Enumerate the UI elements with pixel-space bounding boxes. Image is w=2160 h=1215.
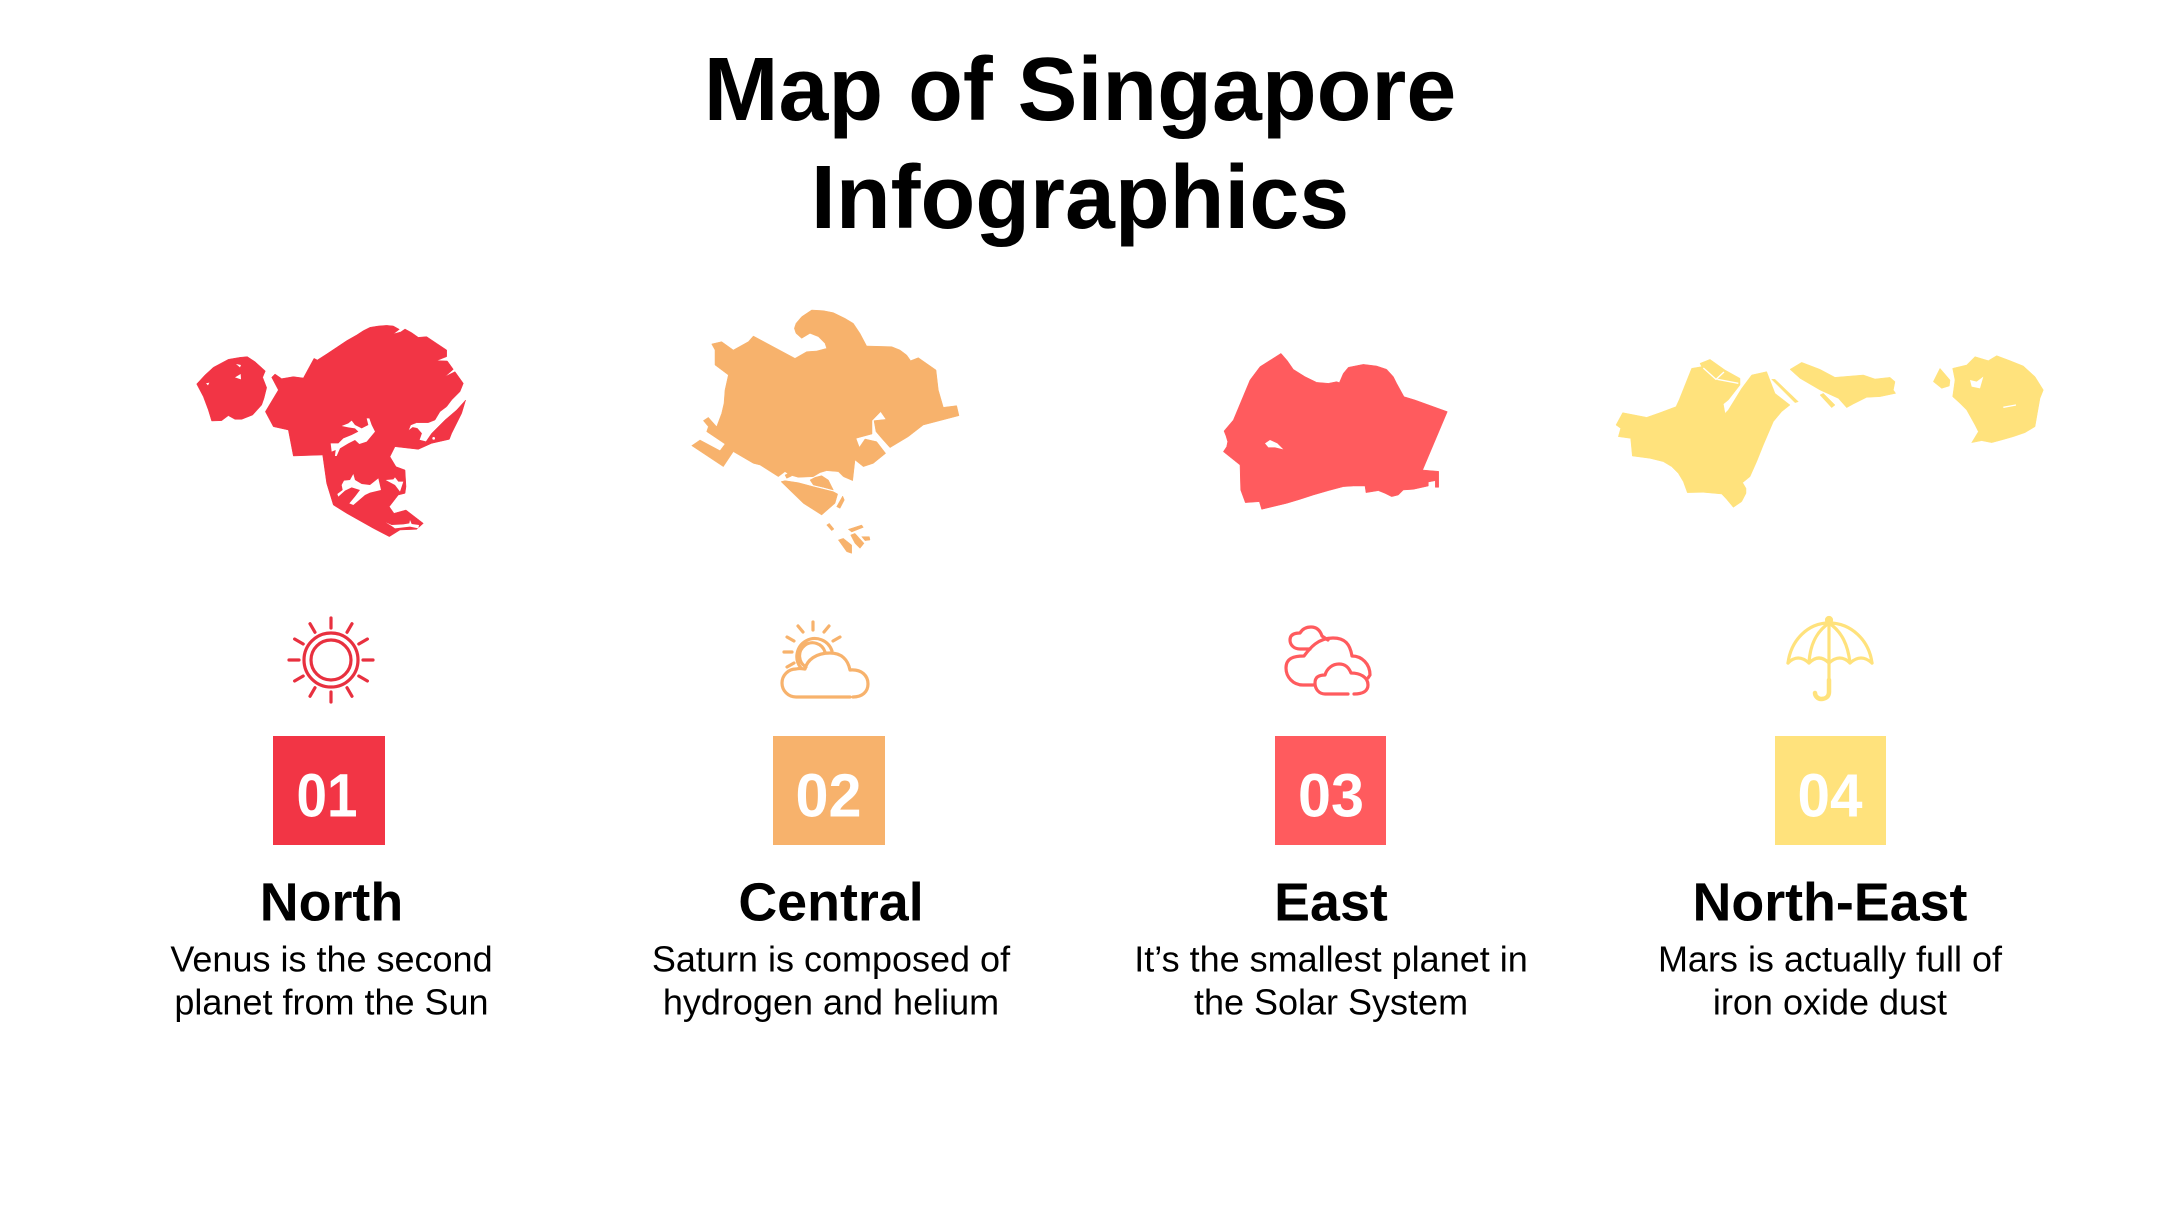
panel: East — [1134, 353, 1528, 1022]
number badge 04 — [1775, 736, 1886, 845]
heading: North-East: North-East — [1693, 872, 1968, 932]
number badge 01 — [273, 736, 385, 845]
description: Central — [652, 938, 1011, 1022]
description: North-East: iron oxide dust — [1713, 982, 1947, 1022]
map: North-East region — [1616, 356, 2043, 507]
number badge 03 — [1275, 736, 1386, 845]
icon: sun behind cloud — [782, 622, 868, 697]
title: Infographics — [811, 148, 1349, 248]
description: Central: hydrogen and helium — [663, 982, 999, 1022]
icon: umbrella — [1788, 618, 1872, 699]
heading: Central: Central — [738, 872, 924, 932]
icon: sun — [289, 618, 373, 702]
description: East — [1134, 938, 1528, 1022]
description: North — [170, 938, 493, 1022]
heading: North: North — [260, 872, 403, 932]
map: North region — [197, 325, 466, 537]
description: East: the Solar System — [1194, 982, 1468, 1022]
icon: clouds — [1286, 627, 1370, 694]
description: East: It’s the smallest planet in — [1134, 938, 1528, 980]
description: North: planet from the Sun — [174, 982, 489, 1022]
description: North-East — [1658, 938, 2003, 1022]
description: North: Venus is the second — [170, 938, 493, 980]
map: East region — [1223, 353, 1447, 509]
number badge 04: 04 — [1798, 762, 1863, 830]
panel: North-East — [1616, 356, 2043, 1023]
heading: East: East — [1274, 872, 1388, 932]
description: Central: Saturn is composed of — [652, 938, 1011, 980]
number badge 02: 02 — [796, 762, 862, 830]
title: Map of Singapore — [704, 40, 1456, 140]
panel: Central — [652, 310, 1011, 1023]
number badge 01: 01 — [296, 762, 358, 830]
panel: North — [170, 325, 493, 1022]
description: North-East: Mars is actually full of — [1658, 938, 2003, 980]
number badge 03: 03 — [1298, 762, 1364, 830]
number badge 02 — [773, 736, 885, 845]
title — [704, 40, 1456, 248]
map: Central region — [692, 310, 959, 553]
